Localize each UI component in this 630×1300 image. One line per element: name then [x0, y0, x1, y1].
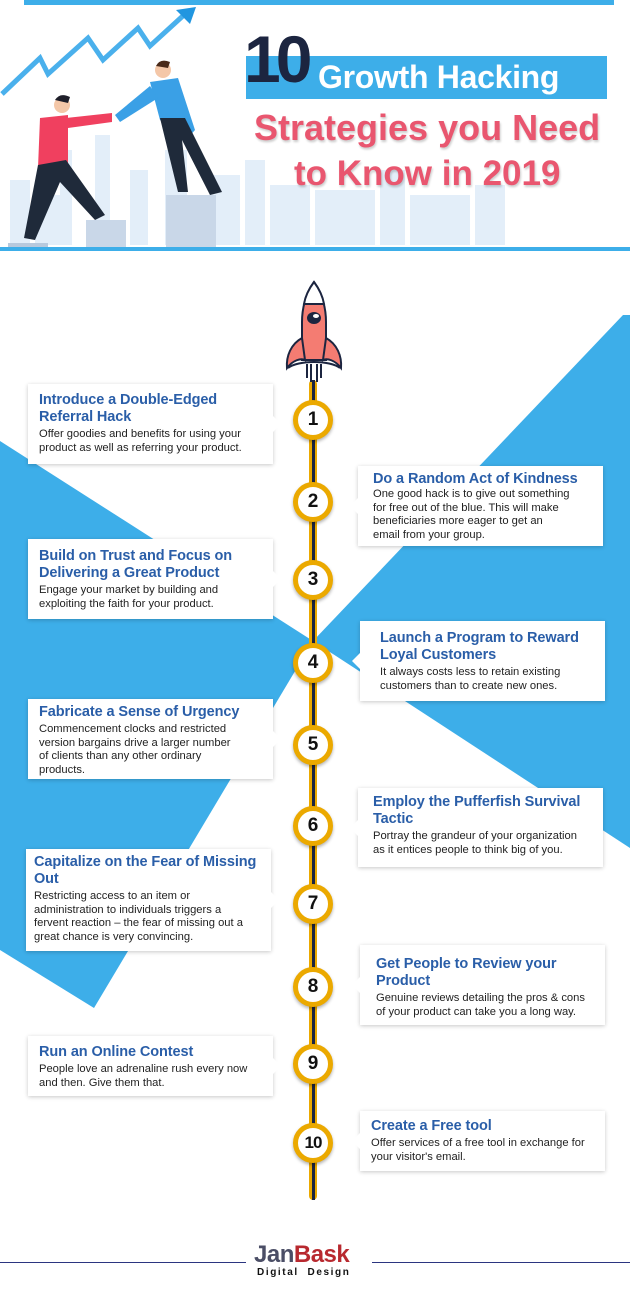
card 2: beneficiaries more eager to get an [373, 515, 543, 527]
card 10 [360, 1111, 605, 1171]
number 1 [293, 400, 333, 440]
card 3 [28, 539, 273, 619]
card 3: Build on Trust and Focus on [39, 548, 232, 564]
top bar [24, 0, 614, 5]
card 8: Get People to Review your [376, 956, 556, 972]
number 1: 1 [308, 409, 318, 430]
footer logo: Digital Design [257, 1267, 350, 1278]
card 1: Offer goodies and benefits for using your [39, 428, 241, 440]
card 7: fervent reaction – the fear of missing out a [34, 917, 243, 929]
card 1: Referral Hack [39, 409, 131, 425]
title: Strategies you Need [254, 107, 600, 148]
card 3: Engage your market by building and [39, 584, 218, 596]
number 5 [293, 725, 333, 765]
title: to Know in 2019 [294, 154, 560, 193]
number 8 [293, 967, 333, 1007]
card 1 [28, 384, 273, 464]
number 3: 3 [308, 569, 318, 590]
number 10 [293, 1123, 333, 1163]
card 5: of clients than any other ordinary [39, 750, 201, 762]
card 2 [358, 466, 603, 546]
person left [54, 97, 70, 113]
number 7: 7 [308, 893, 318, 914]
title [244, 22, 607, 193]
card 9 [28, 1036, 273, 1096]
card 8 [360, 945, 605, 1025]
number 6 [293, 806, 333, 846]
icon: rocket [286, 280, 342, 382]
number 8: 8 [308, 976, 318, 997]
card 9: Run an Online Contest [39, 1044, 193, 1060]
number 9 [293, 1044, 333, 1084]
title: 10 [244, 22, 307, 96]
card 5: Fabricate a Sense of Urgency [39, 704, 239, 720]
card 6 [358, 788, 603, 867]
card 7 [26, 849, 271, 951]
card 5: products. [39, 764, 85, 776]
card 6: Tactic [373, 811, 413, 827]
card 10: Offer services of a free tool in exchange for [371, 1137, 585, 1149]
number 10: 10 [305, 1133, 321, 1152]
card 7: Out [34, 871, 59, 887]
card 9: and then. Give them that. [39, 1076, 165, 1088]
header [0, 0, 630, 251]
card 10: your visitor's email. [371, 1150, 466, 1162]
card 2: email from your group. [373, 528, 485, 540]
card 2: Do a Random Act of Kindness [373, 471, 578, 487]
number 6: 6 [308, 815, 318, 836]
number 7 [293, 884, 333, 924]
card 7: Restricting access to an item or [34, 890, 190, 902]
card 6: Portray the grandeur of your organization [373, 830, 577, 842]
bottom bar [0, 247, 630, 251]
card 3: exploiting the faith for your product. [39, 598, 214, 610]
card 4: Launch a Program to Reward [380, 630, 579, 646]
card 4: customers than to create new ones. [380, 680, 557, 692]
timeline line [309, 380, 317, 1200]
number 3 [293, 560, 333, 600]
card 5: version bargains drive a larger number [39, 736, 231, 748]
card 9: People love an adrenaline rush every now [39, 1063, 247, 1075]
card 1: product as well as referring your product. [39, 442, 242, 454]
card 1: Introduce a Double-Edged [39, 392, 217, 408]
card 7: Capitalize on the Fear of Missing [34, 854, 256, 870]
number 2: 2 [308, 491, 318, 512]
card 8: of your product can take you a long way. [376, 1006, 576, 1018]
number 4: 4 [308, 652, 318, 673]
card 7: great chance is very convincing. [34, 930, 193, 942]
card 6: as it entices people to think big of you. [373, 844, 563, 856]
card 7: administration to individuals triggers a [34, 904, 221, 916]
title: Growth Hacking [318, 59, 559, 95]
card 4: Loyal Customers [380, 647, 496, 663]
number 5: 5 [308, 734, 318, 755]
card 2: One good hack is to give out something [373, 488, 570, 500]
card 4 [360, 621, 605, 701]
number 2 [293, 482, 333, 522]
number 4 [293, 643, 333, 683]
card 3: Delivering a Great Product [39, 565, 219, 581]
card 2: for free out of the blue. This will make [373, 502, 559, 514]
card 8: Genuine reviews detailing the pros & cons [376, 992, 585, 1004]
card 8: Product [376, 973, 430, 989]
card 4: It always costs less to retain existing [380, 666, 560, 678]
card 5: Commencement clocks and restricted [39, 723, 226, 735]
card 6: Employ the Pufferfish Survival [373, 794, 580, 810]
illustration: city, arrow, people [0, 7, 505, 247]
footer logo [0, 1241, 630, 1278]
number 9: 9 [308, 1053, 318, 1074]
person right [155, 62, 171, 78]
card 5 [28, 699, 273, 779]
footer logo: JanBask [254, 1241, 349, 1268]
card 10: Create a Free tool [371, 1118, 492, 1134]
